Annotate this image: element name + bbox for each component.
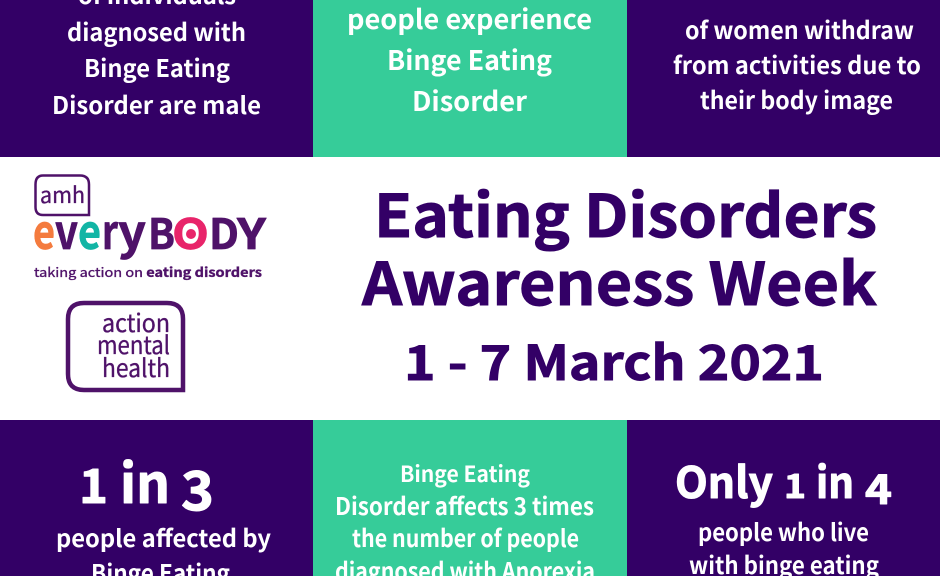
wordmark: everyBODY: Y xyxy=(236,201,267,262)
text: people who live xyxy=(689,513,879,576)
logo: amh everyBODY xyxy=(33,176,267,281)
stat: 1 in 3 xyxy=(79,440,214,526)
panel: body image statistic xyxy=(627,0,940,157)
stat: only 1 in 4 xyxy=(675,449,892,516)
text: people who live: people who live xyxy=(698,513,869,548)
text: people affected: people affected by xyxy=(56,519,271,554)
text: three times xyxy=(335,457,595,576)
logo: action mental health: action xyxy=(102,304,170,340)
wordmark: everyBODY xyxy=(33,194,267,263)
text: three times: Disorder affects 3 times xyxy=(335,487,594,522)
text: people experience BED: Binge Eating xyxy=(387,39,552,78)
wordmark: everyBODY: O xyxy=(172,201,209,262)
stat: only 1 in 4: in xyxy=(816,449,854,511)
panel: 1 in 4 statistic xyxy=(627,420,940,576)
title xyxy=(361,169,877,322)
stat: 1 in 3: 3 xyxy=(181,447,214,526)
wordmark: everyBODY: D xyxy=(209,201,239,262)
wordmark: everyBODY: e xyxy=(78,194,101,263)
stat: 1 in 3: in xyxy=(120,440,170,519)
panel: 1 in 3 statistic xyxy=(0,420,313,576)
stat: only 1 in 4: Only xyxy=(675,449,773,511)
wordmark: everyBODY: r xyxy=(102,194,118,263)
text: people experience BED: Disorder xyxy=(412,80,527,119)
text: three times: the number of people xyxy=(352,519,579,554)
stat: 1 in 3: 1 xyxy=(79,448,108,517)
stat: only 1 in 4: 1 xyxy=(784,460,806,508)
text: women withdraw: their body image xyxy=(700,81,893,116)
panel: anorexia comparison xyxy=(313,420,627,576)
text: women withdraw xyxy=(673,11,921,116)
text: individuals diagnosed male: Binge Eating xyxy=(84,49,230,84)
title: Eating Disorders xyxy=(374,169,877,254)
logo: action mental health xyxy=(68,303,183,390)
text: women withdraw: from activities due to xyxy=(673,46,921,81)
wordmark: everyBODY: e xyxy=(33,194,55,263)
date: 1 - 7 March 2021 xyxy=(404,324,824,394)
logo: action mental health: mental xyxy=(97,326,170,362)
text: women withdraw: of women withdraw xyxy=(685,11,914,46)
panel: people experience statistic xyxy=(313,0,627,157)
text: individuals diagnosed male xyxy=(52,0,261,121)
text: three times: Binge Eating xyxy=(400,457,530,489)
stat: only 1 in 4: 4 xyxy=(865,456,892,516)
text: people experience BED xyxy=(347,0,592,119)
wordmark: everyBODY: y xyxy=(118,194,146,263)
icon: amh speech box xyxy=(36,176,89,215)
text: people affected xyxy=(56,519,271,576)
logo: action mental health: health xyxy=(102,349,170,385)
wordmark: everyBODY: B xyxy=(148,201,175,262)
panel: male statistic xyxy=(0,0,313,157)
icon: amh speech box: amh xyxy=(40,178,85,210)
tagline: taking action on eating disorders xyxy=(34,262,262,281)
title: Awareness Week xyxy=(361,237,877,322)
text: individuals diagnosed male: Disorder are male xyxy=(52,86,261,121)
wordmark: everyBODY: v xyxy=(55,194,78,263)
text: individuals diagnosed male: diagnosed with xyxy=(67,13,246,48)
